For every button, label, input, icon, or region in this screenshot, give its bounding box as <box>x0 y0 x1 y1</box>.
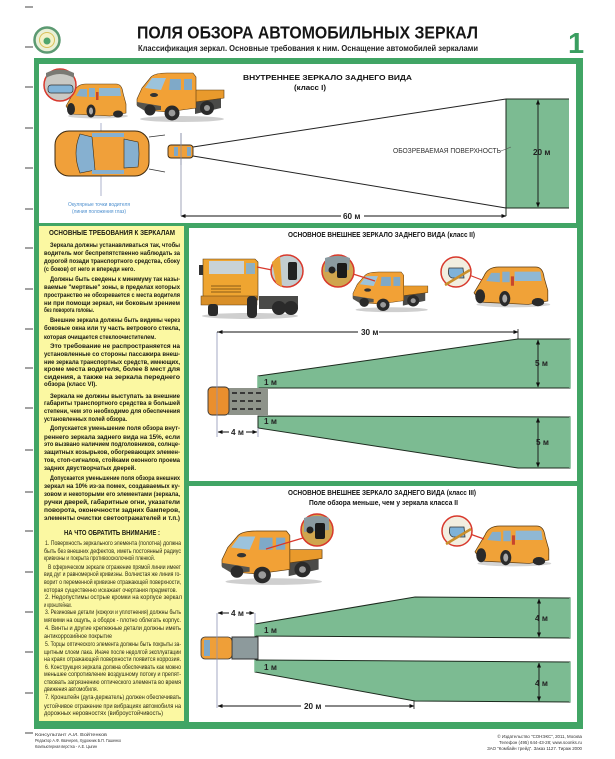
dimensions: 4 m: 4 м <box>535 679 548 688</box>
labels: 1 m <box>264 626 277 672</box>
icon: inset car mirror <box>442 516 484 546</box>
credits left: Компьютерная верстка - А.Е. Цыгин <box>35 744 97 749</box>
publisher right: ЗАО "Комбайн трейд". Заказ 1127. Тираж 2000 <box>487 746 583 751</box>
observed surface <box>506 99 569 216</box>
text: requirements: реннего зеркала заднего вида на 15%, если <box>44 434 180 441</box>
text: attention list: В сферическом зеркале отражение прямой линии имеет <box>48 564 181 571</box>
text: attention list: 3. Резиновые детали (кожухи и уплотнения) должны быть <box>45 609 181 616</box>
heading: class I: (класс I) <box>294 85 326 92</box>
heading: class II: ОСНОВНОЕ ВНЕШНЕЕ ЗЕРКАЛО ЗАДНЕГО ВИДА (класс II) <box>288 232 475 239</box>
observed zone upper <box>258 339 570 388</box>
view cone lines <box>193 99 506 208</box>
title: ПОЛЯ ОБЗОРА АВТОМОБИЛЬНЫХ ЗЕРКАЛ <box>137 22 478 42</box>
text: requirements: дорогой позади транспортного средства, сбоку <box>44 257 180 265</box>
text: attention list: 6. Конструкция зеркала должна обеспечивать как можно <box>45 664 181 671</box>
vertical reference line <box>180 133 182 165</box>
icon: hatchback <box>474 267 550 307</box>
observed zone lower <box>258 416 570 468</box>
text: requirements: (с боков) от него и впереди него. <box>44 265 135 273</box>
dimension: 60 m: 60 м <box>343 212 360 221</box>
text: attention list: 5. Торцы оптического элемента должны быть покрыты за- <box>45 641 181 648</box>
text: requirements: сидения, а также на зеркала переднего <box>44 374 180 381</box>
text: requirements: кроме места водителя, более 8 мест для <box>44 365 180 373</box>
text: requirements: Допускается уменьшение поля обзора внут- <box>50 424 180 432</box>
text: attention list: меньшее сопротивление воздушному потоку и препят- <box>44 671 181 678</box>
text: requirements: это вызвано наличием подголовников, солнце- <box>44 441 180 448</box>
heading: class III <box>288 490 476 507</box>
icon: small car top view <box>168 145 193 158</box>
text: requirements: боковые окна или ту часть ветрового стекла, <box>44 324 180 332</box>
credits left: Консультант А.И. Войтенков <box>35 732 108 737</box>
icon: hatchback <box>66 84 128 118</box>
text: attention list: движения автомобиля. <box>44 686 98 693</box>
text: attention list: 4. Винты и другие крепежные детали должны иметь <box>45 625 181 632</box>
text: requirements: установленных полей обзора. <box>44 415 127 423</box>
dimension: 4 m <box>217 609 255 708</box>
dimensions: 5 m <box>535 340 549 467</box>
text: requirements: ни при помощи зеркал, ни боковым зрением <box>44 299 180 307</box>
icon: hatchback <box>475 526 551 566</box>
text: requirements: без поворота головы. <box>44 306 94 314</box>
panel: exterior mirror class III <box>189 486 577 722</box>
green frame <box>34 58 583 729</box>
text: requirements: установленные со стороны пассажира внеш- <box>44 351 180 358</box>
observed zone upper <box>255 597 570 638</box>
text: attention list: быть без внешних дефектов, иметь постоянный радиус <box>44 548 181 555</box>
heading: class I: ВНУТРЕННЕЕ ЗЕРКАЛО ЗАДНЕГО ВИДА <box>243 75 412 82</box>
text: attention list: вид дуг и равномерной кривизны. Волнистая же линия го- <box>44 571 181 578</box>
publisher right: © Издательство "СОНЭКС", 2011, Москва <box>497 734 583 739</box>
panel: interior mirror class I <box>39 64 576 223</box>
publisher right <box>487 734 583 751</box>
labels: 1 m: 1 м <box>264 378 277 387</box>
text: attention list: щитным слоем лака. Иначе после недолгой эксплуатации <box>44 649 181 656</box>
icon: heavy truck <box>199 259 298 319</box>
text: requirements: Должны быть сведены к минимуму так назы- <box>50 275 180 283</box>
text: requirements <box>44 241 180 522</box>
text: requirements: Это требование не распространяется на <box>50 342 180 350</box>
binder ticks <box>25 7 33 733</box>
label: driver eye points: Окулярные точки водителя <box>68 202 130 208</box>
text: requirements: поворота, оконечности задних бамперов, <box>44 506 180 514</box>
text: requirements: габариты транспортного средства в большей <box>44 399 180 407</box>
text: attention list: 7. Кронштейн (дуга-держатель) должен обеспечивать <box>45 694 181 701</box>
icon: pickup truck <box>353 272 428 312</box>
dimension: 20 m: 20 м <box>533 148 550 157</box>
labels: 1 m <box>264 378 277 426</box>
icon: inset interior mirror <box>44 69 76 101</box>
icon: inset pickup mirror <box>322 255 375 287</box>
labels: 1 m: 1 м <box>264 663 277 672</box>
credits left <box>35 732 121 749</box>
text: requirements: элементы очистки светоотражателей и т.п.) <box>44 514 180 522</box>
text: attention list: кривизны и покрыта противоосколочной пленкой. <box>44 555 155 562</box>
label: driver eye points <box>68 202 130 215</box>
text: requirements: тов, стоп-сигналов, стойками оконного проема <box>44 456 180 464</box>
text: requirements: Внешние зеркала должны быть видимы через <box>50 316 180 324</box>
text: requirements: водитель мог беспрепятственно наблюдать за <box>44 249 180 257</box>
dimension: 20 m <box>533 100 550 207</box>
text: attention list: ствовать загрязнению оптического элемента во время <box>44 679 181 686</box>
icon: inset car mirror <box>441 257 482 287</box>
text: requirements: которая очищается стеклоочистителем. <box>44 334 156 341</box>
label: driver eye points: (линия положения глаз) <box>72 209 126 215</box>
text: requirements: степени, чем это необходимо для обеспечения <box>44 407 180 415</box>
text: attention list: дорожных неровностях (виброустойчивость) <box>44 710 163 717</box>
text: attention list <box>44 540 182 717</box>
dimensions: 5 m: 5 м <box>536 438 549 447</box>
dimension: 30 m: 30 м <box>361 328 378 337</box>
dimensions: 5 m: 5 м <box>535 359 548 368</box>
text: requirements: обзора (класс VI). <box>44 380 97 388</box>
text: requirements: защитных козырьков, обогревающих элемен- <box>44 448 180 456</box>
text: requirements: Допускается уменьшение поля обзора внешних <box>50 474 180 482</box>
label: observed surface: ОБОЗРЕВАЕМАЯ ПОВЕРХНОСТЬ <box>393 146 501 155</box>
icon: car top view <box>55 123 165 196</box>
text: attention list: антикоррозийное покрытие <box>44 633 112 640</box>
observed zone lower <box>255 660 570 702</box>
text: attention list: которая существенно искажает очертания предметов. <box>44 587 177 594</box>
icon: pickup truck <box>222 531 322 585</box>
publisher right: Телефон (495) 644-43-28; www.soonks.ru <box>499 740 583 745</box>
dimension: 4 m: 4 м <box>231 428 244 437</box>
icon: inset pickup mirror <box>266 514 333 549</box>
dimension: 4 m: 4 м <box>231 609 244 618</box>
text: attention list: мягкими на ощупь, а ободок - плотно облегать корпус. <box>44 617 181 624</box>
text: requirements: пространство не обозревается с места водителя <box>44 291 180 299</box>
dimensions: 4 m: 4 м <box>535 614 548 623</box>
sheet number: 1 <box>568 28 584 60</box>
text: attention list: 2. Недопустимы острые кромки на корпусе зеркал <box>45 594 182 601</box>
heading: class III: Поле обзора меньше, чем у зеркала класса II <box>309 499 458 507</box>
subtitle: Классификация зеркал. Основные требования к ним. Оснащение автомобилей зеркалами <box>138 43 478 53</box>
icon: truck top view <box>208 387 268 415</box>
text: requirements: зеркал на 10% из-за помех, создаваемых ку- <box>44 483 180 490</box>
text: requirements: Зеркала должны устанавливаться так, чтобы <box>50 241 180 249</box>
heading: class III: ОСНОВНОЕ ВНЕШНЕЕ ЗЕРКАЛО ЗАДНЕГО ВИДА (класс III) <box>288 490 476 497</box>
text: requirements: задних двустворчатых дверей. <box>44 464 136 472</box>
text: requirements: зовом и некоторыми его элементами (зеркала, <box>44 491 180 498</box>
text: attention list: и кронштейнах. <box>44 602 72 609</box>
dimension: 4 m <box>218 428 258 437</box>
panel: exterior mirror class II <box>189 228 577 481</box>
text: attention list: устойчивое отражение при вибрациях автомобиля на <box>44 703 181 710</box>
icon: pickup truck <box>137 73 224 122</box>
text: attention list: на краях отражающей поверхности появится коррозия. <box>44 656 181 663</box>
text: requirements: ручки дверей, габаритные огни, указатели <box>44 498 180 506</box>
text: requirements: Зеркала не должны выступать за внешние <box>50 393 180 400</box>
text: attention list: ворит о переменной кривизне отражающей поверхности, <box>44 579 181 586</box>
icon: inset truck mirror <box>257 255 303 287</box>
heading: requirements: ОСНОВНЫЕ ТРЕБОВАНИЯ К ЗЕРКАЛАМ <box>49 228 175 237</box>
text: requirements: ние зеркала транспортных средств, имеющих, <box>44 359 180 366</box>
icon: truck top view <box>201 637 258 659</box>
dimensions: 4 m <box>535 599 548 701</box>
heading: attention: НА ЧТО ОБРАТИТЬ ВНИМАНИЕ : <box>64 530 160 537</box>
dimension: 20 m: 20 м <box>304 702 321 711</box>
text: attention list: 1. Поверхность зеркального элемента (полотна) должна <box>45 540 181 547</box>
labels: 1 m: 1 м <box>264 417 277 426</box>
credits left: Редактор А.Ф. Квачерев, Художник Б.П. Гашенко <box>35 738 121 743</box>
logo <box>34 28 60 52</box>
text: requirements: ваемые "мертвые" зоны, в пределах которых <box>44 284 180 291</box>
labels: 1 m: 1 м <box>264 626 277 635</box>
heading: class I <box>243 75 412 92</box>
panel: basic requirements <box>39 226 184 721</box>
